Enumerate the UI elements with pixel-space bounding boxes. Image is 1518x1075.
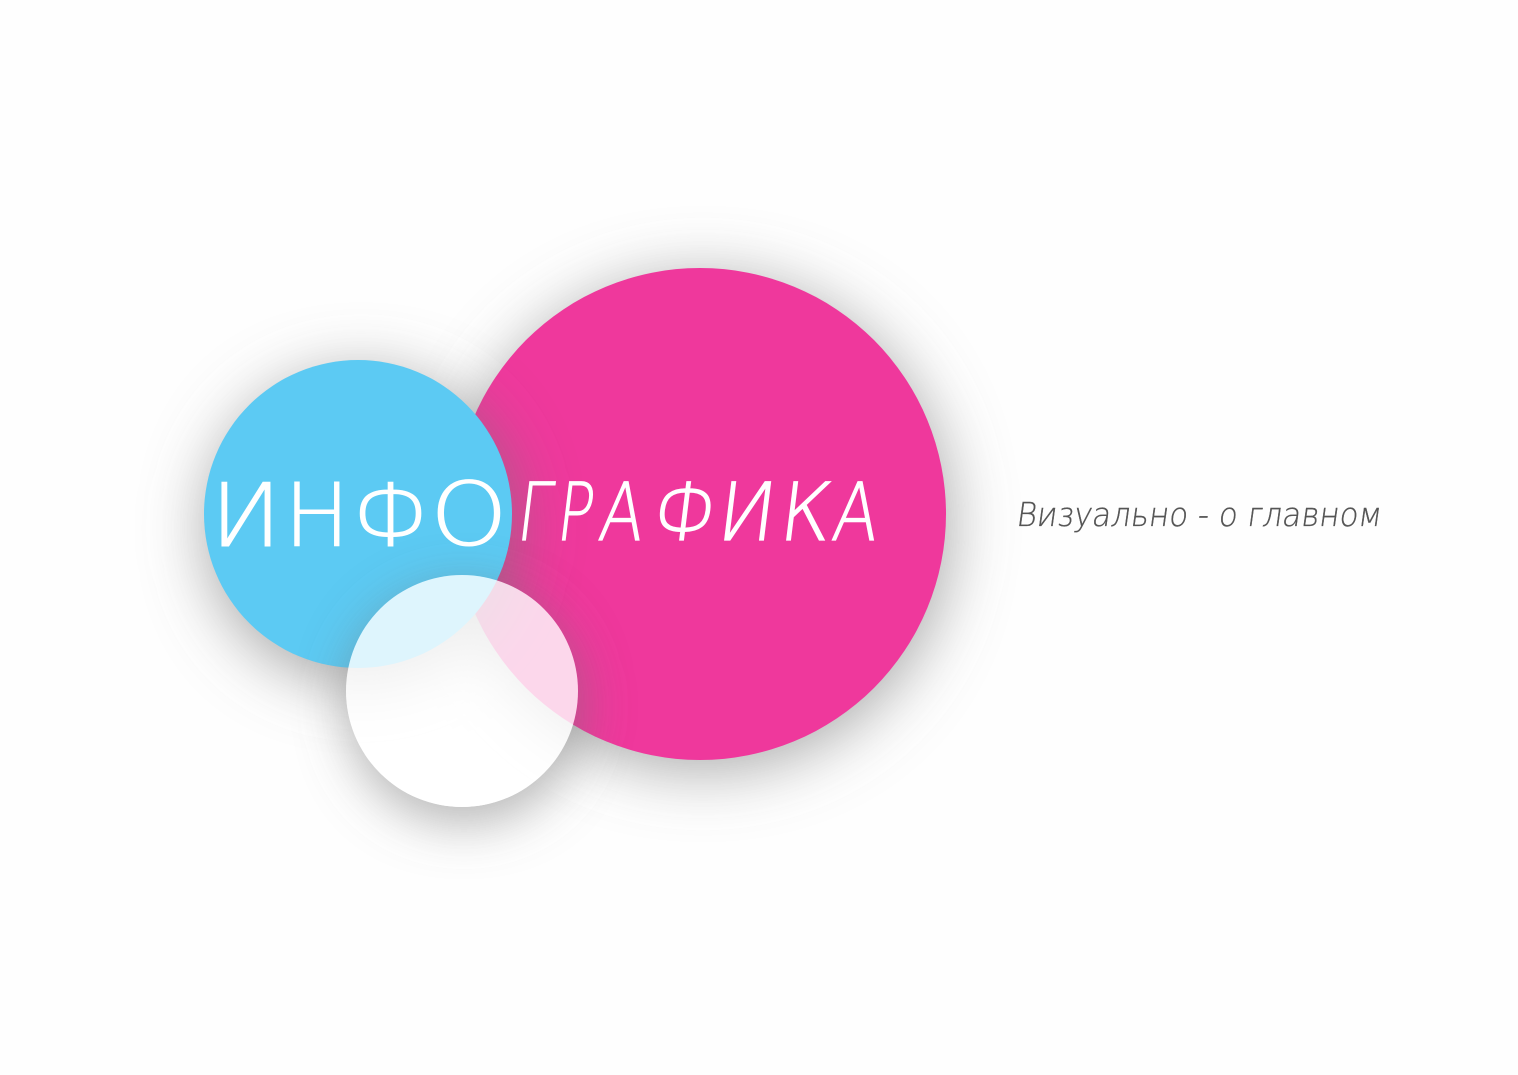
title part: ГРАФИКА: Р [553,465,600,559]
title part: ГРАФИКА: И [713,466,782,559]
logo infographic canvas [168,238,1379,852]
title: ИНФОГРАФИКА [211,464,885,567]
title part: ИНФО: Ф [352,465,429,567]
tagline: Визуально - о главном [1014,495,1385,534]
title part: ГРАФИКА: А [828,466,885,560]
blue circle with shadow [204,360,517,684]
title part: ГРАФИКА [513,465,885,560]
title part: ИНФО: О [430,464,508,566]
title part: ИНФО: И [211,466,281,567]
title part: ГРАФИКА: Ф [648,467,722,560]
title part: ГРАФИКА: К [775,466,838,559]
title part: ГРАФИКА: Г [513,466,558,559]
title part: ИНФО: Н [284,465,350,567]
pink circle with shadow [454,268,951,772]
white translucent circle with shadow [346,575,582,824]
title part: ИНФО [211,464,508,567]
title part: ГРАФИКА: А [594,467,650,560]
